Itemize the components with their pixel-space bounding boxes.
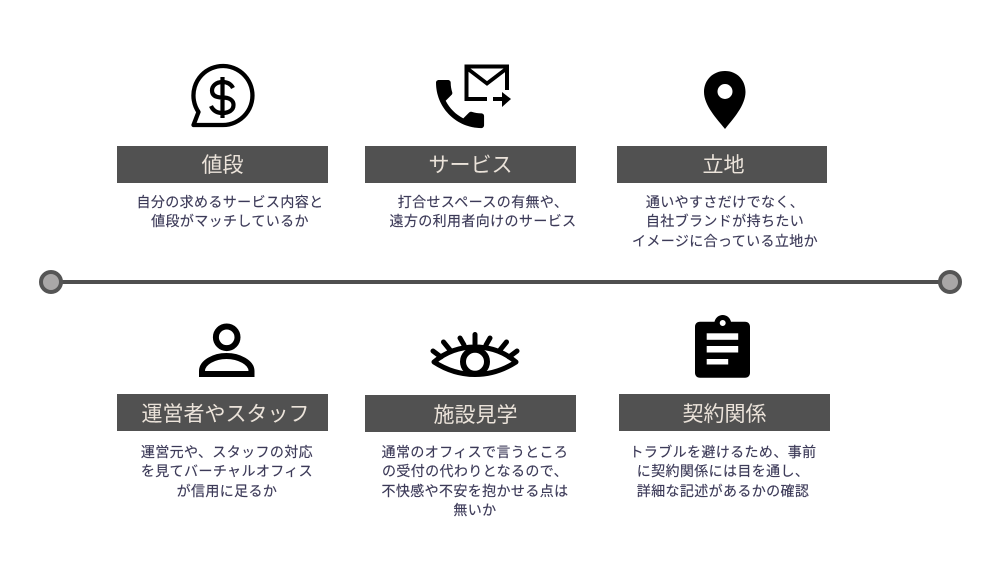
- panel: contract: [619, 315, 830, 499]
- text: location description: 通いやすさだけでなく、: [646, 194, 804, 210]
- text: contract description: トラブルを避けるため、事前: [630, 444, 816, 460]
- icon: person: [199, 324, 254, 377]
- text: location description: イメージに合っている立地か: [632, 233, 818, 249]
- text: price description: 自分の求めるサービス内容と: [137, 194, 323, 210]
- heading: operator and staff: [117, 394, 328, 431]
- panel: price: [117, 64, 328, 229]
- text: contract description: [630, 444, 816, 499]
- heading: price: [117, 146, 328, 183]
- text: facility tour description: 通常のオフィスで言うところ: [382, 444, 568, 460]
- panel: service: [365, 64, 576, 229]
- text: operator description: 運営元や、スタッフの対応: [141, 444, 313, 460]
- text: price description: 値段がマッチしているか: [151, 213, 309, 229]
- heading: facility tour: [365, 395, 576, 432]
- text: facility tour description: 不快感や不安を抱かせる点は: [382, 483, 568, 499]
- text: operator description: が信用に足るか: [177, 483, 277, 499]
- heading: service: サービス: [428, 154, 512, 177]
- panel: facility tour: [365, 332, 576, 518]
- heading: location: [617, 146, 827, 183]
- timeline divider with end dots: [39, 270, 962, 294]
- text: service description: 遠方の利用者向けのサービス: [390, 213, 576, 229]
- heading: service: [365, 146, 576, 183]
- text: facility tour description: の受付の代わりとなるので、: [382, 463, 568, 479]
- text: service description: 打合せスペースの有無や、: [398, 194, 568, 210]
- icon: clipboard: [695, 315, 750, 378]
- heading: price: 値段: [202, 154, 244, 177]
- text: contract description: に契約関係には目を通し、: [637, 463, 809, 479]
- heading: contract: [619, 394, 830, 431]
- heading: contract: 契約関係: [682, 403, 766, 426]
- icon: dollar speech bubble: [191, 64, 255, 128]
- text: facility tour description: 無いか: [453, 502, 497, 518]
- text: operator description: を見てバーチャルオフィス: [141, 463, 313, 479]
- heading: operator and staff: 運営者やスタッフ: [142, 403, 310, 426]
- panel: operator and staff: [117, 324, 328, 499]
- heading: location: 立地: [702, 154, 744, 177]
- text: location description: [632, 194, 818, 249]
- icon: phone and forwarded mail: [436, 64, 511, 128]
- text: location description: 自社ブランドが持ちたい: [646, 213, 804, 229]
- text: facility tour description: [382, 444, 568, 518]
- text: operator description: [141, 444, 313, 499]
- icon: map pin: [704, 71, 746, 129]
- heading: facility tour: 施設見学: [434, 404, 518, 427]
- text: service description: [390, 194, 576, 229]
- icon: eye with lashes: [430, 332, 520, 377]
- text: price description: [137, 194, 323, 229]
- text: contract description: 詳細な記述があるかの確認: [637, 483, 809, 499]
- panel: location: [617, 71, 827, 249]
